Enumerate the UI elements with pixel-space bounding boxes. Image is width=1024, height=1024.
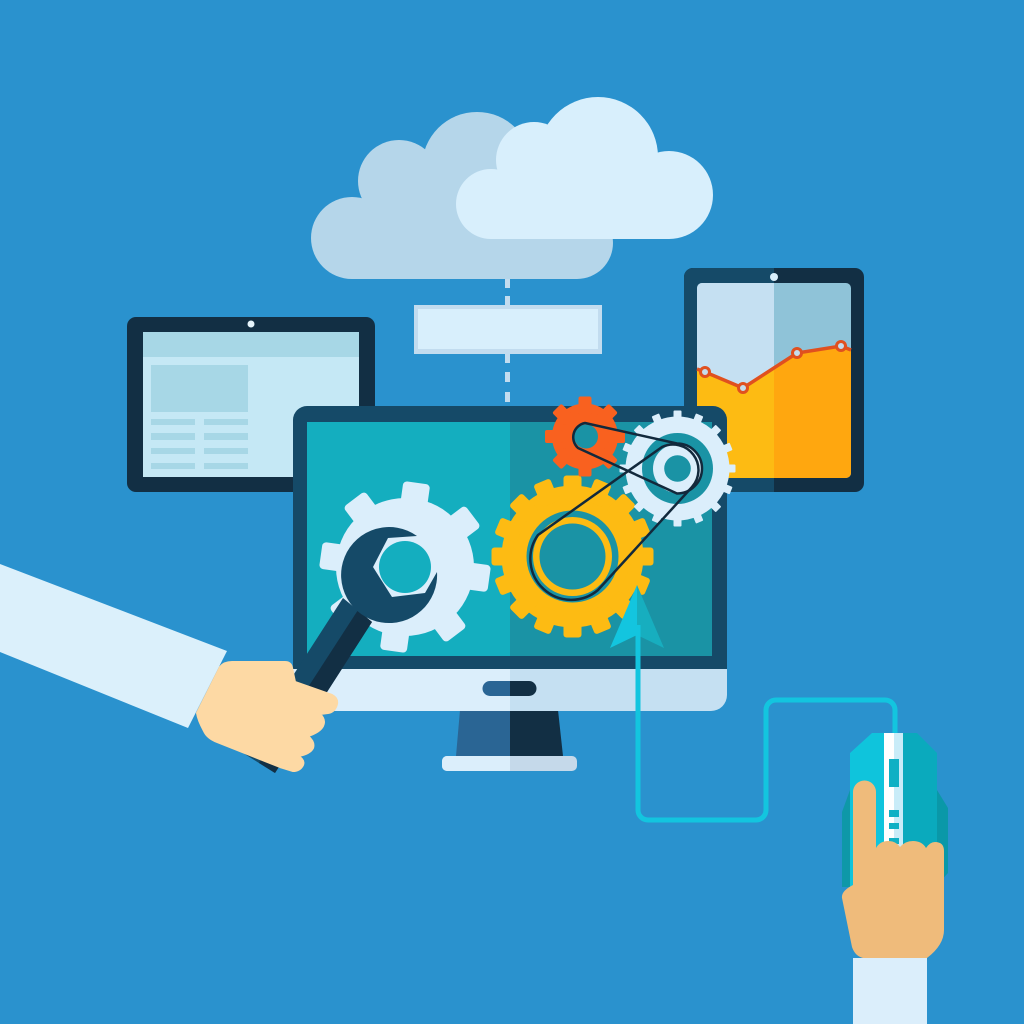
front cloud xyxy=(456,97,713,239)
small white gear xyxy=(620,410,736,526)
orange gear xyxy=(545,396,625,476)
monitor button xyxy=(483,681,537,696)
dashed connector xyxy=(505,279,510,402)
drive belts xyxy=(530,423,702,600)
wrench xyxy=(243,527,437,773)
monitor xyxy=(293,406,727,771)
area chart xyxy=(697,342,851,478)
left tablet xyxy=(127,317,375,492)
right hand xyxy=(842,780,944,958)
large white gear xyxy=(309,471,501,663)
left sleeve xyxy=(0,564,227,728)
stand xyxy=(442,710,577,771)
back cloud xyxy=(311,112,613,279)
server box xyxy=(414,305,602,354)
mouse xyxy=(842,733,948,890)
yellow gear xyxy=(492,476,654,638)
cursor arrow xyxy=(610,585,664,648)
left hand xyxy=(197,662,337,771)
mouse cable xyxy=(638,625,895,820)
right tablet with chart xyxy=(684,268,864,492)
right sleeve xyxy=(853,958,927,1024)
